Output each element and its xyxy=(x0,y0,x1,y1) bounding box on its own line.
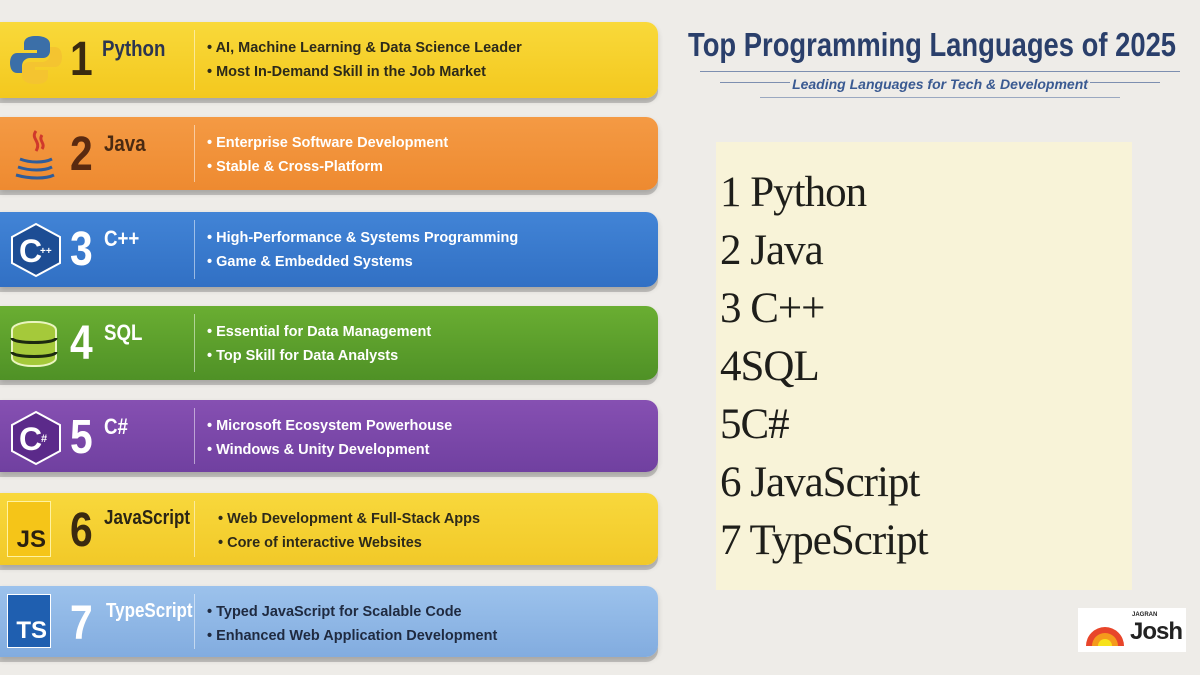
icon: java cup xyxy=(16,130,55,180)
icon: python xyxy=(10,36,62,84)
icon: c# hexagon xyxy=(11,410,61,466)
logo: jagran josh: JAGRAN xyxy=(1132,612,1157,618)
bar: Java xyxy=(0,117,658,190)
bullets: c#: • Windows & Unity Development xyxy=(207,442,429,458)
bar: JavaScript: 6 xyxy=(70,504,93,557)
bullets: javascript: • Core of interactive Websites xyxy=(218,535,422,551)
list panel: 6 JavaScript xyxy=(720,459,919,506)
bar: TypeScript: 7 xyxy=(70,597,93,650)
bullets: java: • Stable & Cross-Platform xyxy=(207,159,383,175)
bullets: c# xyxy=(207,418,452,458)
title: Top Programming Languages of 2025 xyxy=(688,26,1176,63)
list panel: 7 TypeScript xyxy=(720,517,928,564)
bullets: sql xyxy=(207,324,432,364)
icon: c++ hexagon: ++ xyxy=(40,246,52,257)
bullets: python: • AI, Machine Learning & Data Science Leader xyxy=(207,40,522,56)
list panel: 2 Java xyxy=(720,227,823,274)
bullets: python: • Most In-Demand Skill in the Job Market xyxy=(207,64,486,80)
icon: TS xyxy=(7,594,51,648)
bar: C++: C++ xyxy=(104,226,139,251)
list panel: 5C# xyxy=(720,401,789,448)
bar: Java: 2 xyxy=(70,128,93,181)
bar: Python xyxy=(0,22,658,98)
logo: jagran josh xyxy=(1078,608,1186,652)
bar: Python: 1 xyxy=(70,33,93,86)
bar: C#: 5 xyxy=(70,411,93,464)
bullets: typescript xyxy=(207,604,498,644)
bar: SQL: 4 xyxy=(70,317,93,370)
bar: JavaScript xyxy=(0,493,658,565)
bar: C++ xyxy=(0,212,658,287)
bullets: java xyxy=(207,135,448,175)
bullets: c++: • High-Performance & Systems Programming xyxy=(207,230,518,246)
list panel xyxy=(716,142,1132,590)
bullets: c#: • Microsoft Ecosystem Powerhouse xyxy=(207,418,452,434)
bar: JavaScript: JavaScript xyxy=(104,507,190,529)
bullets: sql: • Essential for Data Management xyxy=(207,324,431,340)
bar: TypeScript xyxy=(0,586,658,657)
bullets: python xyxy=(207,40,522,80)
icon: c++ hexagon xyxy=(11,222,61,278)
bar: C#: C# xyxy=(104,414,128,439)
bar: C++: 3 xyxy=(70,223,93,276)
bullets: sql: • Top Skill for Data Analysts xyxy=(207,348,398,364)
subtitle with lines: Leading Languages for Tech & Development xyxy=(792,76,1088,92)
bullets: java: • Enterprise Software Development xyxy=(207,135,448,151)
icon: database xyxy=(10,321,58,367)
bar: SQL xyxy=(0,306,658,380)
icon: TS: TS xyxy=(16,617,47,644)
bar: Java: Java xyxy=(104,131,146,156)
bullets: javascript: • Web Development & Full-Stack Apps xyxy=(218,511,480,527)
icon: c# hexagon: C xyxy=(19,421,42,457)
bar: SQL: SQL xyxy=(104,320,142,345)
icon: c# hexagon: # xyxy=(41,433,47,445)
bullets: c++: • Game & Embedded Systems xyxy=(207,254,413,270)
bullets: javascript xyxy=(218,511,480,551)
bullets: typescript: • Typed JavaScript for Scalable Code xyxy=(207,604,462,620)
icon: c++ hexagon: C xyxy=(19,233,42,269)
bar: C# xyxy=(0,400,658,472)
logo: jagran josh: Josh xyxy=(1130,618,1182,645)
list panel: 4SQL xyxy=(720,343,819,390)
bar: TypeScript: TypeScript xyxy=(106,600,193,622)
icon: JS: JS xyxy=(17,526,46,553)
list panel: 3 C++ xyxy=(720,285,824,332)
icon: JS xyxy=(7,501,51,557)
bullets: typescript: • Enhanced Web Application Development xyxy=(207,628,497,644)
list panel: 1 Python xyxy=(720,169,866,216)
bullets: c++ xyxy=(207,230,518,270)
bar: Python: Python xyxy=(102,36,165,61)
